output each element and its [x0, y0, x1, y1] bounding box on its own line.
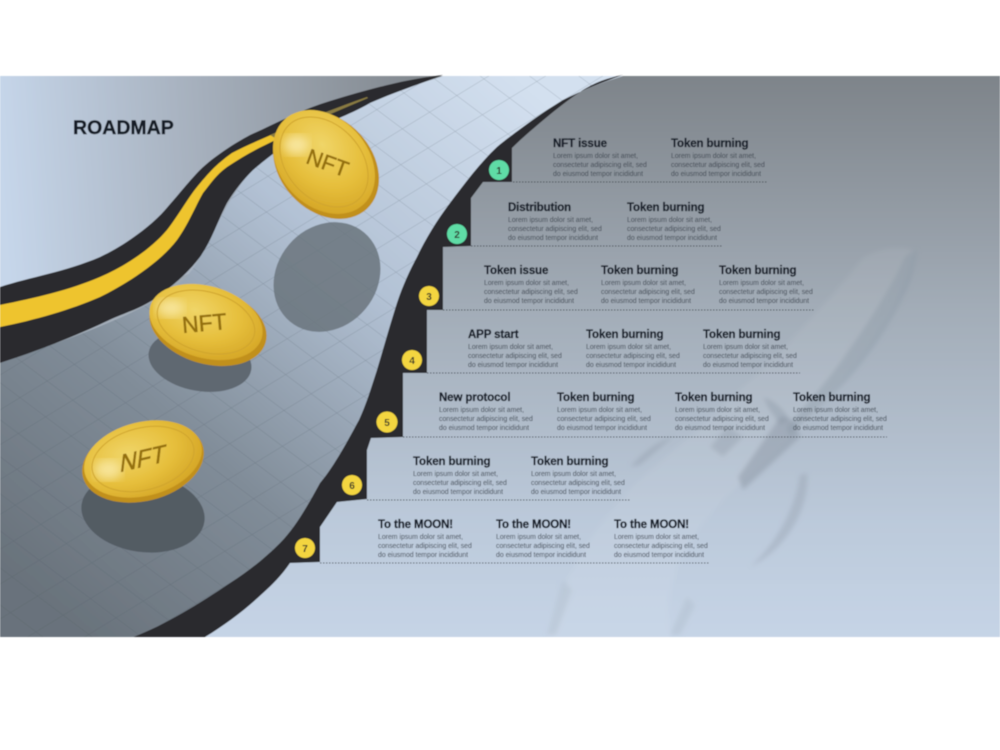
step 5 [376, 392, 887, 437]
step 1: do eiusmod tempor incididunt [553, 171, 643, 178]
upper left background [0, 76, 445, 340]
step 6: 6 [349, 481, 355, 492]
step 1: consectetur adipiscing elit, sed [553, 162, 647, 169]
step 4 [402, 329, 800, 373]
step 7: consectetur adipiscing elit, sed [378, 543, 472, 550]
step 7: do eiusmod tempor incididunt [378, 552, 468, 559]
step 3: consectetur adipiscing elit, sed [719, 289, 813, 296]
step 5: Token burning [557, 392, 635, 404]
step 5: New protocol [439, 392, 510, 404]
title: ROADMAP [73, 117, 174, 139]
floor grid [0, 76, 623, 637]
step 7: do eiusmod tempor incididunt [614, 552, 704, 559]
step 6: consectetur adipiscing elit, sed [413, 480, 507, 487]
step 6: Token burning [531, 456, 609, 468]
step 7: Lorem ipsum dolor sit amet, [614, 534, 699, 541]
coin 3: NFT [119, 440, 167, 478]
step 7 [295, 519, 710, 563]
step 4: Token burning [703, 329, 781, 341]
step 5: Lorem ipsum dolor sit amet, [557, 407, 642, 414]
step 4: do eiusmod tempor incididunt [703, 362, 793, 369]
step 7: 7 [302, 544, 308, 555]
step 5: do eiusmod tempor incididunt [793, 425, 883, 432]
step 1: consectetur adipiscing elit, sed [671, 162, 765, 169]
step 6: Token burning [413, 456, 491, 468]
step 6: do eiusmod tempor incididunt [413, 489, 503, 496]
step 5: Lorem ipsum dolor sit amet, [675, 407, 760, 414]
step 2: consectetur adipiscing elit, sed [508, 226, 602, 233]
step 4: APP start [468, 329, 519, 341]
curved road with yellow stripe [0, 75, 443, 363]
step 3: 3 [426, 292, 432, 303]
step 1: Lorem ipsum dolor sit amet, [553, 153, 638, 160]
step 1: Lorem ipsum dolor sit amet, [671, 153, 756, 160]
step 2: do eiusmod tempor incididunt [508, 235, 598, 242]
step 4: Lorem ipsum dolor sit amet, [586, 344, 671, 351]
step 6: consectetur adipiscing elit, sed [531, 480, 625, 487]
coin 1 [251, 90, 401, 240]
step 3: Lorem ipsum dolor sit amet, [484, 280, 569, 287]
step 5: consectetur adipiscing elit, sed [557, 416, 651, 423]
step 5: do eiusmod tempor incididunt [675, 425, 765, 432]
step 4: consectetur adipiscing elit, sed [586, 353, 680, 360]
step 2: consectetur adipiscing elit, sed [627, 226, 721, 233]
step 2: Token burning [627, 202, 705, 214]
step 7: consectetur adipiscing elit, sed [496, 543, 590, 550]
step 3: do eiusmod tempor incididunt [484, 298, 574, 305]
step 4: consectetur adipiscing elit, sed [468, 353, 562, 360]
step 2: 2 [454, 230, 460, 241]
step 5: consectetur adipiscing elit, sed [675, 416, 769, 423]
step 7: Lorem ipsum dolor sit amet, [378, 534, 463, 541]
coin 1: NFT [303, 144, 352, 182]
step 6: Lorem ipsum dolor sit amet, [413, 471, 498, 478]
step 5: Lorem ipsum dolor sit amet, [439, 407, 524, 414]
step 5: do eiusmod tempor incididunt [439, 425, 529, 432]
step 4: Token burning [586, 329, 664, 341]
step 3: consectetur adipiscing elit, sed [484, 289, 578, 296]
step 1 [489, 138, 768, 182]
step 5: Token burning [675, 392, 753, 404]
coin 3 [73, 409, 213, 515]
step 5: consectetur adipiscing elit, sed [793, 416, 887, 423]
step 1: 1 [496, 166, 502, 177]
step 2: Lorem ipsum dolor sit amet, [508, 217, 593, 224]
step 5: Token burning [793, 392, 871, 404]
step 1: Token burning [671, 138, 749, 150]
coin shadows [76, 200, 403, 560]
step 7: Lorem ipsum dolor sit amet, [496, 534, 581, 541]
step 1: do eiusmod tempor incididunt [671, 171, 761, 178]
step 2: Lorem ipsum dolor sit amet, [627, 217, 712, 224]
step 3: do eiusmod tempor incididunt [719, 298, 809, 305]
step 3: do eiusmod tempor incididunt [601, 298, 691, 305]
step 4: Lorem ipsum dolor sit amet, [703, 344, 788, 351]
step 4: consectetur adipiscing elit, sed [703, 353, 797, 360]
background panel [0, 76, 1000, 637]
step 6: do eiusmod tempor incididunt [531, 489, 621, 496]
step 4: do eiusmod tempor incididunt [468, 362, 558, 369]
step 3: consectetur adipiscing elit, sed [601, 289, 695, 296]
step 6: Lorem ipsum dolor sit amet, [531, 471, 616, 478]
stepped dark timeline band [133, 75, 623, 637]
step 3: Token issue [484, 265, 548, 277]
step 7: To the MOON! [614, 519, 689, 531]
step 7: do eiusmod tempor incididunt [496, 552, 586, 559]
step 7: consectetur adipiscing elit, sed [614, 543, 708, 550]
step 2 [447, 202, 722, 246]
step 3 [419, 265, 815, 310]
rocket watermark [550, 304, 896, 634]
step 7: To the MOON! [378, 519, 453, 531]
step 3: Lorem ipsum dolor sit amet, [601, 280, 686, 287]
step 2: Distribution [508, 202, 571, 214]
step 1: NFT issue [553, 138, 607, 150]
step 5: consectetur adipiscing elit, sed [439, 416, 533, 423]
step 3: Token burning [601, 265, 679, 277]
step 4: do eiusmod tempor incididunt [586, 362, 676, 369]
step 3: Token burning [719, 265, 797, 277]
step 3: Lorem ipsum dolor sit amet, [719, 280, 804, 287]
step 7: To the MOON! [496, 519, 571, 531]
coin 2: NFT [181, 308, 228, 338]
step 5: do eiusmod tempor incididunt [557, 425, 647, 432]
step 5: 5 [384, 418, 390, 429]
step 4: Lorem ipsum dolor sit amet, [468, 344, 553, 351]
coin 2 [140, 271, 276, 379]
step 5: Lorem ipsum dolor sit amet, [793, 407, 878, 414]
step 4: 4 [409, 356, 415, 367]
step 2: do eiusmod tempor incididunt [627, 235, 717, 242]
step 6 [342, 456, 630, 500]
